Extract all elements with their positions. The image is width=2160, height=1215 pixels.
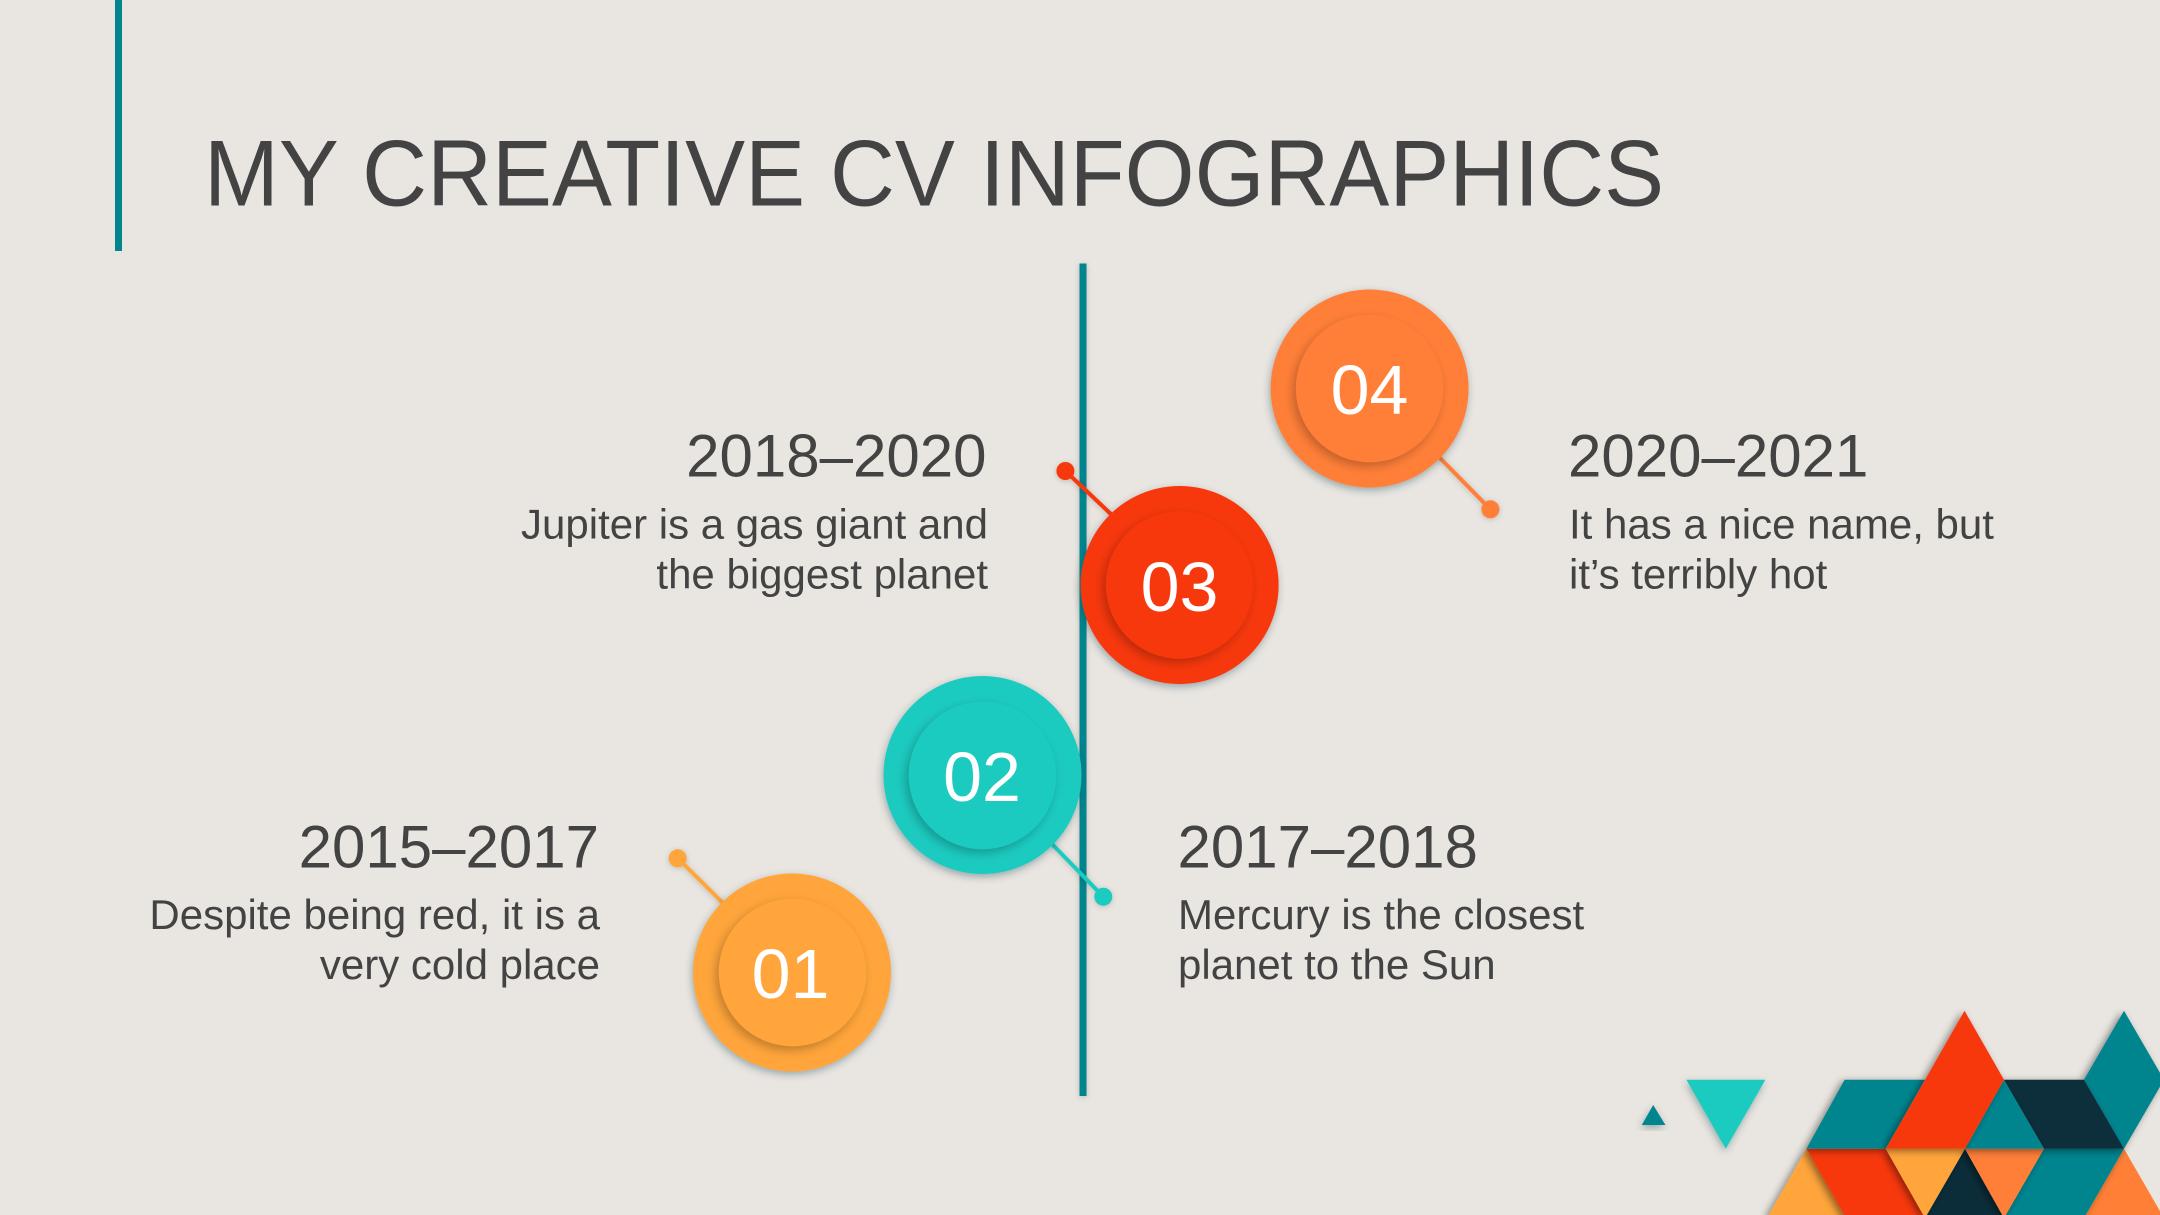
- description 04: It has a nice name, but: [1569, 500, 1994, 547]
- number 04: 04: [1331, 351, 1408, 429]
- number 01: 01: [752, 935, 829, 1013]
- inner circle 04: [1296, 315, 1443, 462]
- mosaic bottom row: [1767, 1149, 2160, 1215]
- date 2020–2021: 2020–2021: [1568, 423, 1868, 490]
- inner circle 03: [1106, 511, 1253, 659]
- description 02: planet to the Sun: [1178, 941, 1496, 988]
- date 2017–2018: 2017–2018: [1178, 814, 1478, 881]
- date 2018–2020: 2018–2020: [686, 423, 986, 490]
- circle 04: [1271, 290, 1469, 488]
- circle 02: [884, 676, 1082, 874]
- milestone 03 marker: [1056, 462, 1279, 684]
- title: MY CREATIVE CV INFOGRAPHICS: [204, 122, 1664, 226]
- description 03: Jupiter is a gas giant and: [521, 500, 988, 547]
- icon: small teal triangle: [1642, 1105, 1665, 1125]
- description 01: Despite being red, it is a: [149, 891, 600, 938]
- connector 01: [669, 849, 725, 905]
- triangle mosaic decoration: [1767, 1011, 2160, 1215]
- text block 2015–2017: [149, 814, 601, 988]
- inner circle 02: [909, 702, 1056, 849]
- milestone 04 marker: [1271, 290, 1499, 518]
- milestone 02 marker: [884, 676, 1112, 906]
- circle 01: [693, 874, 891, 1072]
- connector 03: [1056, 462, 1114, 517]
- description 03: the biggest planet: [656, 550, 988, 597]
- timeline axis: [1080, 264, 1086, 1096]
- number 03: 03: [1141, 548, 1218, 626]
- icon: cyan inverted triangle: [1686, 1080, 1765, 1149]
- text block 2017–2018: [1178, 814, 1584, 988]
- milestone 01 marker: [669, 849, 891, 1072]
- description 02: Mercury is the closest: [1178, 891, 1584, 938]
- title accent bar: [115, 0, 122, 251]
- mosaic top row: [1806, 1011, 2160, 1149]
- text block 2020–2021: [1568, 423, 1994, 597]
- connector 02: [1050, 842, 1112, 906]
- text block 2018–2020: [521, 423, 988, 597]
- connector 04: [1438, 456, 1499, 518]
- date 2015–2017: 2015–2017: [299, 814, 599, 881]
- description 04: it’s terribly hot: [1569, 550, 1828, 597]
- description 01: very cold place: [320, 941, 600, 988]
- circle 03: [1081, 486, 1279, 684]
- inner circle 01: [719, 899, 866, 1046]
- number 02: 02: [943, 738, 1021, 816]
